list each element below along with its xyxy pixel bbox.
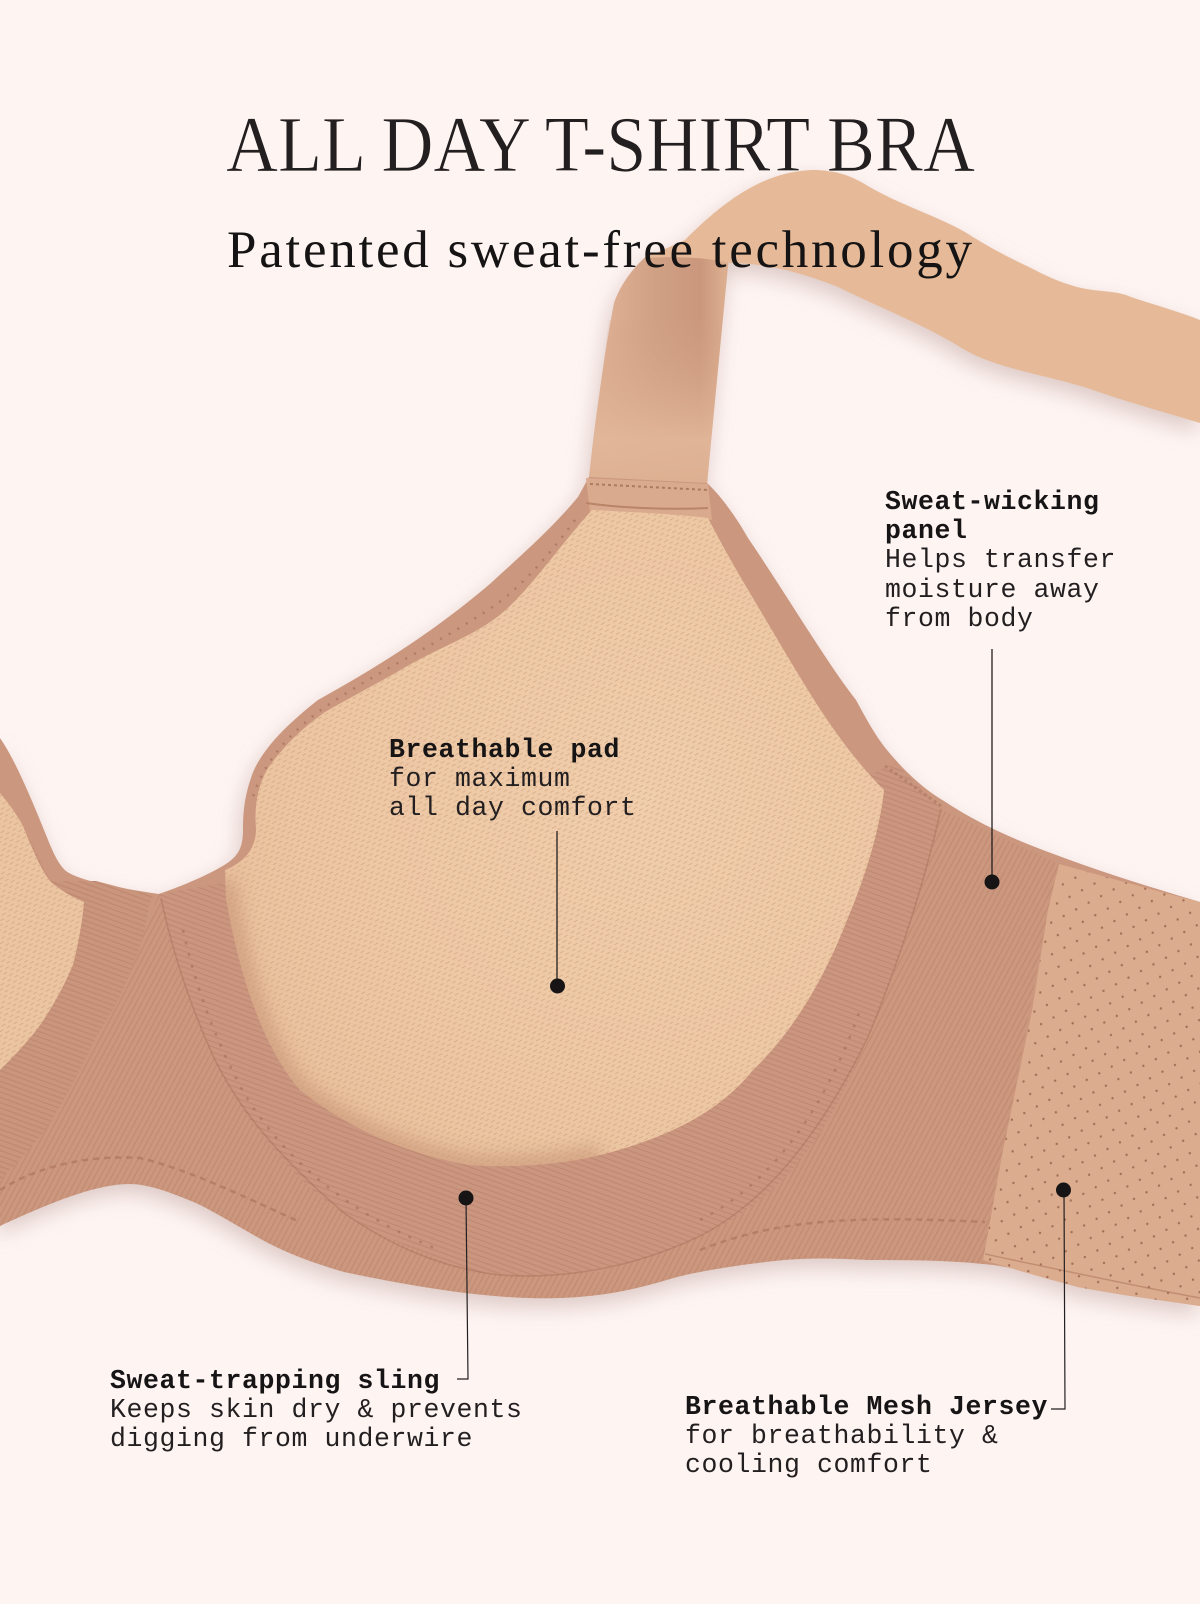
callout: sweat-trapping sling: Sweat-trapping sling (110, 1366, 440, 1396)
callout: breathable mesh jersey: Breathable Mesh Jersey (685, 1392, 1048, 1422)
mesh jersey panel (983, 864, 1200, 1306)
sweat-trapping sling (159, 763, 941, 1276)
callout: sweat-wicking panel: Helps transfer (885, 545, 1116, 575)
title: ALL DAY T-SHIRT BRA (226, 102, 975, 189)
sling stitching (183, 930, 860, 1250)
back strap (645, 170, 1200, 423)
pad inner shadow (225, 880, 600, 1166)
strap base patch (586, 478, 712, 520)
marker: sweat-wicking panel (984, 874, 1000, 890)
callout: sweat-wicking panel: from body (885, 604, 1034, 634)
callout: sweat-trapping sling (110, 1190, 523, 1454)
band twill fabric (0, 809, 1059, 1298)
breathable pad (225, 510, 884, 1166)
mesh hem (985, 1254, 1200, 1298)
callout: sweat-wicking panel: panel (885, 516, 968, 546)
left cup pad (0, 793, 84, 1070)
callout: breathable mesh jersey (685, 1182, 1071, 1480)
subtitle: Patented sweat-free technology (227, 221, 972, 279)
strap seam (586, 484, 708, 509)
callout: breathable mesh jersey: cooling comfort (685, 1450, 933, 1480)
front strap lower shading (589, 320, 722, 485)
callout: breathable pad: all day comfort (389, 793, 637, 823)
callout: sweat-trapping sling: digging from underwire (110, 1424, 473, 1454)
callout: breathable pad: Breathable pad (389, 735, 620, 765)
illustration: bra (0, 170, 1200, 1306)
callout: sweat-wicking panel (885, 487, 1116, 890)
side seam tab (885, 766, 941, 806)
leader line: breathable pad (556, 831, 558, 986)
binding stitches (252, 520, 575, 800)
bra body (0, 477, 1200, 1306)
callout: breathable pad (389, 735, 637, 994)
callout: sweat-trapping sling: Keeps skin dry & prevents (110, 1395, 523, 1425)
leader line: mesh jersey (1051, 1190, 1065, 1409)
marker: mesh jersey (1056, 1182, 1071, 1198)
front strap (589, 253, 729, 483)
left cup (0, 793, 153, 1180)
marker: sling (458, 1190, 474, 1206)
leader line: sweat-wicking panel (991, 649, 993, 882)
marker: breathable pad (550, 978, 565, 994)
callout: breathable pad: for maximum (389, 764, 571, 794)
callout: breathable mesh jersey: for breathability & (685, 1421, 999, 1451)
leader line: sling (457, 1198, 468, 1379)
left cup ring (0, 793, 153, 1180)
band stitching (0, 1157, 985, 1250)
callout: sweat-wicking panel: moisture away (885, 575, 1100, 605)
callout: sweat-wicking panel: Sweat-wicking (885, 487, 1100, 517)
